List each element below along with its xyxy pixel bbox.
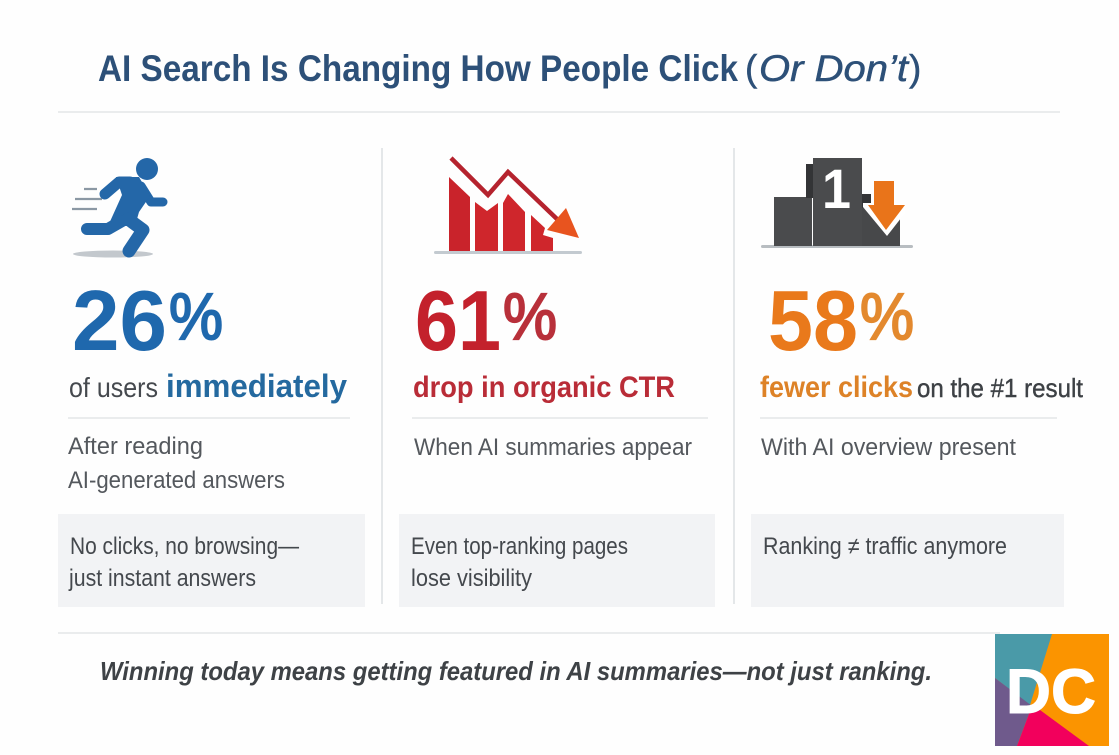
stat: 26% <box>72 274 223 369</box>
callout box: No clicks, no browsing— <box>70 533 299 560</box>
panel: organic CTR <box>399 158 715 607</box>
stat: 58%: % <box>860 279 914 353</box>
callout box: Even top-ranking pages <box>411 533 628 560</box>
title: AI Search Is Changing How People Click <box>98 48 738 89</box>
icon: podium with down arrow: 1 <box>822 157 851 220</box>
stat label: drop in organic CTR <box>413 371 675 404</box>
callout box <box>751 514 1064 607</box>
title: ) <box>909 48 921 89</box>
stat: 61%: 61 <box>415 274 501 369</box>
panel: #1 result <box>751 157 1084 607</box>
callout box: lose visibility <box>411 565 532 592</box>
stat label emphasis: immediately <box>166 368 347 404</box>
title: ( <box>745 48 758 89</box>
stat: 58% <box>768 274 914 369</box>
callout box: Ranking ≠ traffic anymore <box>763 533 1007 560</box>
stat: 58%: 58 <box>768 274 858 369</box>
stat label: on the #1 result <box>917 373 1084 403</box>
icon: falling bar chart <box>434 158 582 254</box>
stat: 61% <box>415 274 557 369</box>
context text: AI-generated answers <box>68 467 285 494</box>
panel: users <box>58 158 365 607</box>
stat: 61%: % <box>503 279 557 353</box>
callout box <box>58 514 365 607</box>
context text: After reading <box>68 433 203 460</box>
context text: When AI summaries appear <box>414 434 692 461</box>
footer takeaway: Winning today means getting featured in AI summaries—not just ranking. <box>100 656 932 686</box>
stat label: of users <box>69 372 158 403</box>
icon: running person <box>72 158 163 258</box>
callout box: just instant answers <box>68 565 256 592</box>
callout box <box>399 514 715 607</box>
title: Or Don’t <box>759 48 910 89</box>
logo: DC <box>995 634 1109 746</box>
logo: DC: DC <box>1006 657 1096 727</box>
context text: With AI overview present <box>761 434 1016 461</box>
icon: podium with down arrow <box>761 157 913 248</box>
stat: 26%: 26 <box>72 274 167 369</box>
stat: 26%: % <box>169 279 223 353</box>
stat label emphasis: fewer clicks <box>760 371 913 404</box>
